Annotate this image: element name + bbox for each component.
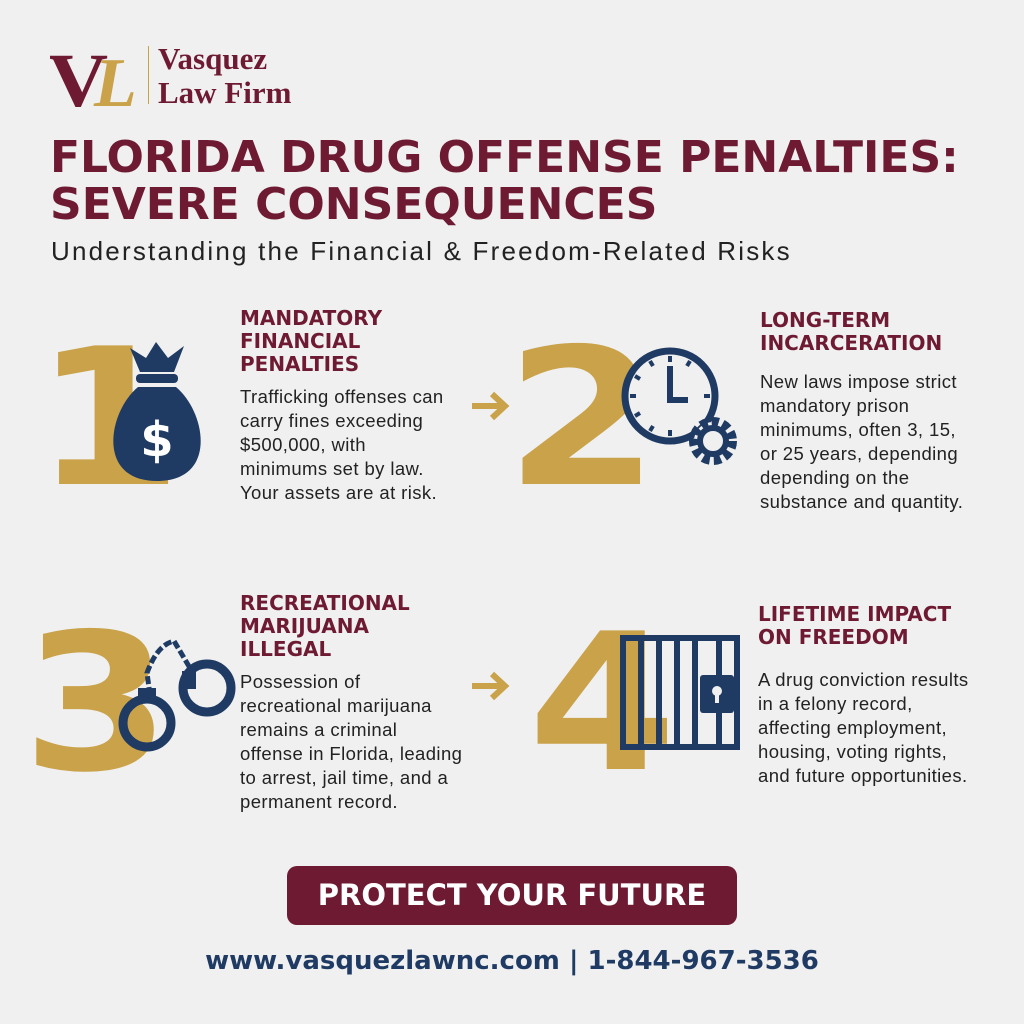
- subtitle: Understanding the Financial & Freedom-Related Risks: [51, 236, 792, 266]
- firm name: Law Firm: [158, 75, 291, 110]
- text: Trafficking offenses can: [240, 386, 444, 407]
- text: Possession of: [240, 671, 360, 692]
- icon: money bag: [113, 342, 201, 481]
- logo mark: [50, 40, 137, 112]
- number 1: 1: [34, 307, 183, 529]
- text: carry fines exceeding: [240, 410, 423, 431]
- text: affecting employment,: [758, 717, 947, 738]
- text: A drug conviction results: [758, 669, 969, 690]
- text: permanent record.: [240, 791, 398, 812]
- heading: [240, 306, 382, 376]
- heading: FINANCIAL: [240, 329, 360, 353]
- icon: clock with gear: [622, 348, 737, 465]
- text: remains a criminal: [240, 719, 397, 740]
- heading: RECREATIONAL: [240, 591, 410, 615]
- panel 3: [118, 591, 462, 812]
- text: offense in Florida, leading: [240, 743, 462, 764]
- text: minimums, often 3, 15,: [760, 419, 956, 440]
- number 3: 3: [22, 592, 171, 814]
- CTA button: PROTECT YOUR FUTURE: [318, 878, 706, 912]
- contact info: www.vasquezlawnc.com | 1-844-967-3536: [205, 946, 819, 976]
- text: to arrest, jail time, and a: [240, 767, 448, 788]
- text: [240, 671, 462, 812]
- heading: [760, 308, 942, 355]
- panel 4: [620, 602, 969, 786]
- logo: [50, 40, 291, 112]
- heading: [758, 602, 952, 649]
- number 4: 4: [528, 592, 677, 814]
- heading: LONG-TERM: [760, 308, 890, 332]
- title: FLORIDA DRUG OFFENSE PENALTIES:: [50, 132, 959, 183]
- heading: PENALTIES: [240, 352, 359, 376]
- icon: jail bars: [620, 635, 740, 750]
- panel 2: [622, 308, 963, 512]
- text: $500,000, with: [240, 434, 366, 455]
- heading: [240, 591, 410, 661]
- heading: LIFETIME IMPACT: [758, 602, 951, 626]
- heading: MANDATORY: [240, 306, 382, 330]
- text: Your assets are at risk.: [240, 482, 437, 503]
- text: recreational marijuana: [240, 695, 432, 716]
- arrow 1: [472, 392, 510, 420]
- firm name: [158, 41, 291, 110]
- panel 1: [113, 306, 444, 503]
- title: [50, 132, 959, 230]
- text: substance and quantity.: [760, 491, 963, 512]
- text: [760, 371, 963, 512]
- heading: INCARCERATION: [760, 331, 942, 355]
- text: depending on the: [760, 467, 909, 488]
- heading: ON FREEDOM: [758, 625, 909, 649]
- text: and future opportunities.: [758, 765, 968, 786]
- text: minimums set by law.: [240, 458, 424, 479]
- number 2: 2: [505, 307, 659, 529]
- icon: handcuffs: [118, 640, 236, 752]
- text: housing, voting rights,: [758, 741, 947, 762]
- CTA button: [287, 866, 737, 925]
- firm name: Vasquez: [158, 41, 267, 76]
- text: or 25 years, depending: [760, 443, 958, 464]
- text: New laws impose strict: [760, 371, 957, 392]
- text: in a felony record,: [758, 693, 913, 714]
- text: mandatory prison: [760, 395, 909, 416]
- arrow 2: [472, 672, 510, 700]
- text: [240, 386, 444, 503]
- heading: ILLEGAL: [240, 637, 331, 661]
- icon: money bag: $: [140, 412, 174, 468]
- heading: MARIJUANA: [240, 614, 369, 638]
- title: SEVERE CONSEQUENCES: [50, 179, 657, 230]
- text: [758, 669, 969, 786]
